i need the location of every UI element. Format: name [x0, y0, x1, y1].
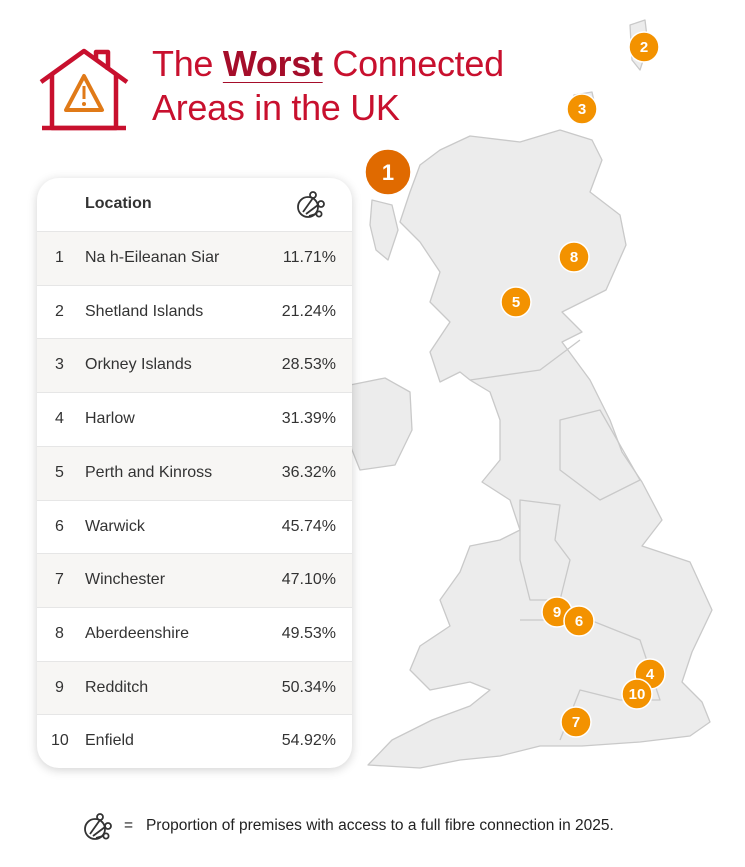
panel: ranking table: 11.71% — [283, 249, 336, 266]
map markers: 4 — [646, 666, 655, 683]
panel: ranking table: Enfield — [85, 732, 134, 749]
icon: house with warning — [40, 48, 128, 130]
panel: ranking table: 1 — [55, 249, 64, 266]
panel: ranking table: 50.34% — [282, 679, 336, 696]
table header — [85, 191, 325, 218]
map markers: 1 — [382, 160, 394, 185]
footer legend — [84, 813, 614, 840]
panel: ranking table: Winchester — [85, 571, 165, 588]
panel: ranking table: 54.92% — [282, 732, 336, 749]
panel: ranking table: 5 — [55, 464, 64, 481]
panel: ranking table: Na h-Eileanan Siar — [85, 249, 219, 266]
panel: ranking table: 6 — [55, 518, 64, 534]
panel: ranking table: 10 — [51, 732, 69, 749]
footer legend: = Proportion of premises with access to a full fibre connection in 2025. — [124, 817, 614, 834]
panel: ranking table: 28.53% — [282, 356, 336, 373]
panel: ranking table: Aberdeenshire — [85, 625, 189, 642]
map markers: 10 — [629, 686, 645, 703]
panel: ranking table — [37, 178, 352, 768]
panel: ranking table: 47.10% — [282, 571, 336, 588]
panel: ranking table: Perth and Kinross — [85, 464, 212, 481]
table header: Location — [85, 195, 152, 212]
panel: ranking table: 3 — [55, 356, 64, 373]
panel: ranking table: Warwick — [85, 518, 145, 534]
icon: fibre legend — [84, 813, 112, 840]
panel: ranking table: 36.32% — [282, 464, 336, 481]
panel: ranking table: 45.74% — [282, 518, 336, 534]
panel: ranking table: Redditch — [85, 679, 148, 696]
map markers: 5 — [512, 294, 520, 311]
title: The Worst Connected — [152, 43, 504, 84]
panel: ranking table: Harlow — [85, 410, 135, 427]
title — [152, 43, 504, 128]
panel: ranking table: 31.39% — [282, 410, 336, 427]
map markers: 9 — [553, 604, 561, 621]
map markers: 7 — [572, 714, 580, 731]
panel: ranking table: 7 — [55, 571, 64, 588]
panel: ranking table: 8 — [55, 625, 64, 642]
panel: ranking table: 49.53% — [282, 625, 336, 642]
map markers: 3 — [578, 101, 586, 118]
map markers: 6 — [575, 613, 583, 630]
panel: ranking table: 9 — [55, 679, 64, 696]
map markers: 8 — [570, 249, 578, 266]
title: Areas in the UK — [152, 87, 400, 128]
panel: ranking table: Shetland Islands — [85, 303, 203, 320]
panel: ranking table: 21.24% — [282, 303, 336, 320]
panel: ranking table: 2 — [55, 303, 64, 320]
panel: ranking table: Orkney Islands — [85, 356, 192, 373]
panel: ranking table: 4 — [55, 410, 64, 427]
icon: fibre — [297, 191, 325, 218]
map markers: 2 — [640, 39, 648, 56]
